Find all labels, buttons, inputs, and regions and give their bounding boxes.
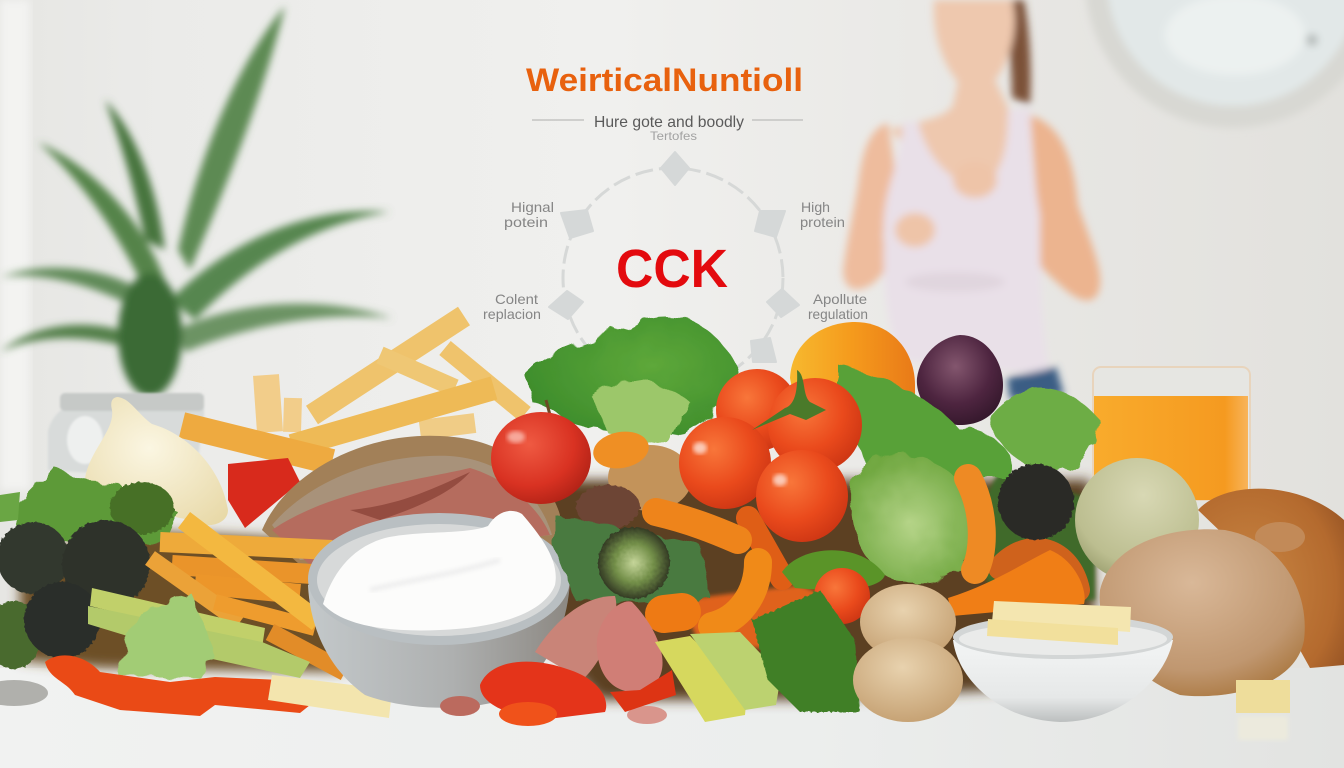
node: top [661, 152, 689, 185]
red chili [45, 655, 310, 716]
blurred wall clock [1085, 0, 1344, 128]
onion [85, 397, 228, 525]
blurred woman [843, 0, 1100, 400]
avocado [655, 632, 781, 722]
label: right upper: High [801, 199, 830, 215]
title: WeirticalNuntioll [526, 62, 803, 98]
potato and brown items [576, 445, 692, 529]
arms and shoulders [843, 123, 935, 289]
upper fries [182, 316, 525, 462]
greens behind carrots [555, 515, 712, 604]
label: left lower: replacion [483, 306, 541, 322]
node: upper right [755, 211, 785, 237]
label: right lower: regulation [808, 306, 868, 322]
window strip [0, 0, 30, 490]
node: lower left [549, 291, 583, 319]
label: left upper: potein [504, 214, 548, 230]
white bowl with butter [953, 601, 1173, 722]
green pepper [782, 550, 885, 590]
blackberry [0, 522, 69, 594]
broccoli and blackberries [0, 468, 178, 669]
butter slice [987, 619, 1118, 645]
bread [1100, 529, 1305, 696]
label: left upper: Hignal [511, 199, 554, 215]
right side lettuce [838, 365, 1100, 583]
parsley [752, 590, 860, 712]
orange fruit [790, 322, 915, 430]
orange juice glass [1093, 367, 1250, 500]
small tomatoes [480, 568, 870, 726]
head and neck [890, 0, 1030, 190]
label: right lower: Apollute [813, 291, 867, 307]
orange produce backing [680, 470, 1095, 650]
tank top [884, 108, 1050, 375]
brussels sprout [598, 527, 670, 599]
tomato: left [491, 400, 591, 504]
lower fries [150, 520, 345, 672]
yogurt [323, 511, 556, 630]
blackberry right [998, 464, 1074, 540]
subtitle with rules: Hure gote and boodly [594, 114, 744, 131]
carrots [656, 478, 1078, 626]
sausage slices [440, 596, 667, 724]
cycle diagram [549, 152, 799, 388]
cheese cube [1236, 680, 1290, 740]
melon [1075, 458, 1199, 582]
cheese stick [268, 675, 392, 718]
potatoes [853, 584, 963, 722]
plum [917, 335, 1003, 425]
hands [953, 162, 997, 198]
node: lower right [767, 289, 799, 317]
lettuce top [525, 316, 736, 445]
label: left lower: Colent [495, 291, 538, 307]
hair [995, 0, 1031, 104]
butter slice [992, 601, 1131, 632]
blurred plant [0, 6, 392, 397]
tomato stem [752, 370, 826, 430]
small carrot [590, 427, 652, 473]
marble table [0, 668, 1344, 768]
small caption: Tertofes [650, 129, 697, 143]
red pepper [228, 458, 300, 528]
node: bottom right [751, 338, 776, 362]
chest shadow [905, 272, 1005, 292]
jar [48, 393, 204, 480]
blackberry [62, 520, 150, 608]
jeans [1007, 367, 1064, 400]
yogurt bowl [308, 511, 570, 708]
meat [262, 436, 560, 565]
food shadow backing [20, 480, 1095, 700]
spoon [0, 680, 48, 706]
CCK center label: CCK [616, 239, 728, 299]
blackberry [24, 582, 100, 658]
node: upper left [561, 210, 593, 238]
tomatoes cluster [679, 369, 862, 542]
celery [88, 588, 310, 678]
pumpkin [1198, 489, 1344, 668]
orange bell pepper [948, 550, 1085, 616]
label: right upper: protein [800, 214, 845, 230]
